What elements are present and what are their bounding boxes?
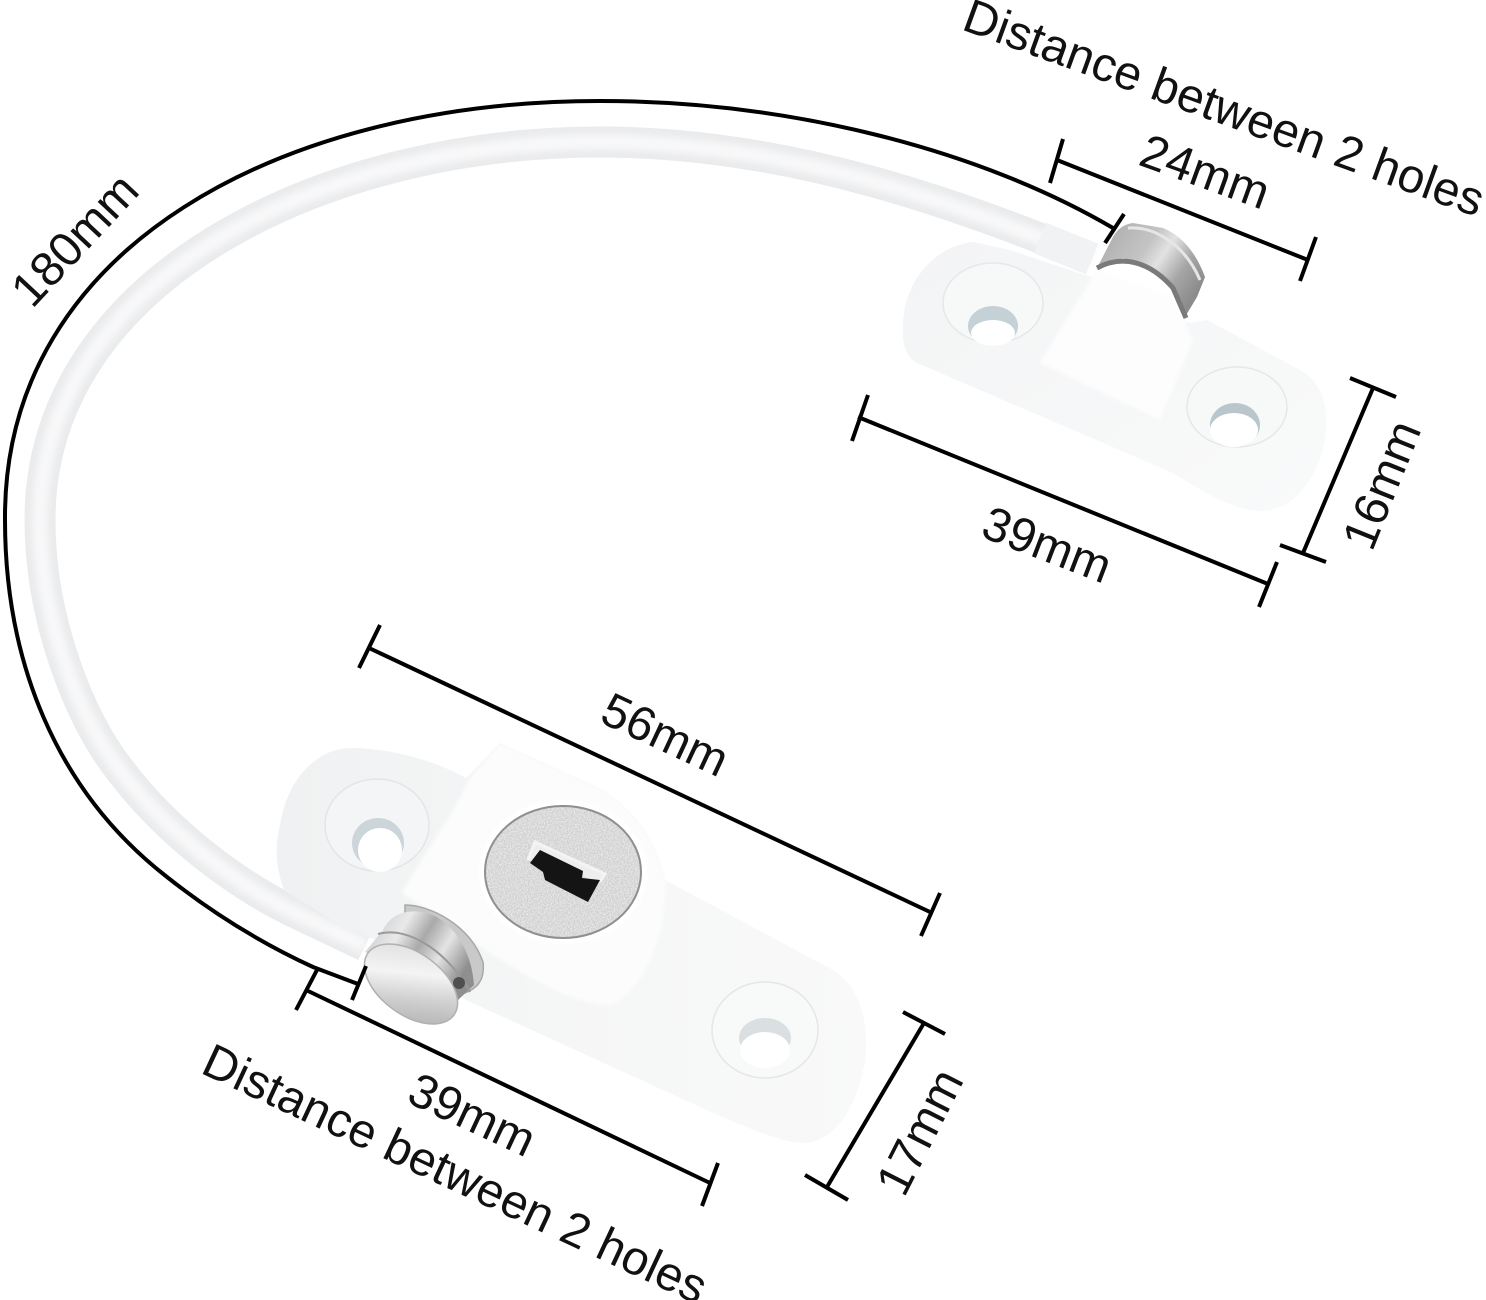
label: 39mm: 39mm bbox=[975, 497, 1119, 594]
keyhole rim bbox=[528, 842, 605, 882]
label: 16mm: 16mm bbox=[1333, 413, 1432, 557]
lock cylinder with keyhole bbox=[479, 800, 647, 944]
label: 56mm: 56mm bbox=[593, 683, 736, 788]
label: 24mm: 24mm bbox=[1133, 125, 1277, 220]
keyhole bbox=[530, 850, 600, 902]
dimension: 16mm base width, top bbox=[1280, 378, 1432, 562]
top bracket bbox=[903, 223, 1326, 511]
top bracket pedestal bbox=[1040, 270, 1193, 420]
label: 39mm: 39mm bbox=[400, 1063, 543, 1168]
bottom bracket left screw hole bbox=[325, 779, 429, 872]
bottom bracket right screw hole bbox=[712, 982, 818, 1078]
dimension: 39mm hole distance, bottom bbox=[296, 966, 718, 1206]
short tick at top cable end bbox=[1105, 214, 1124, 243]
dimension: 39mm base length, top bbox=[852, 395, 1277, 607]
top bracket left screw hole bbox=[943, 263, 1043, 346]
top bracket base plate bbox=[903, 242, 1326, 511]
top bracket right screw hole bbox=[1187, 367, 1287, 447]
bottom bracket base plate bbox=[277, 743, 866, 1143]
dimension: 17mm lock body width bbox=[805, 1012, 974, 1204]
dimension: 56mm lock body length bbox=[359, 625, 940, 936]
bottom bracket lock housing bbox=[402, 743, 665, 1005]
bottom bracket bbox=[277, 743, 866, 1143]
cable end resting over the base plate bbox=[1040, 238, 1092, 259]
cable: white sheathed wire bbox=[40, 142, 1092, 946]
label: 180mm cable length: 180mm bbox=[1, 164, 149, 317]
bottom bracket metal stud bbox=[350, 905, 483, 1040]
top bracket metal stud bbox=[1097, 223, 1205, 318]
dimension line: 180mm cable length arc bbox=[5, 101, 1113, 984]
label: 17mm: 17mm bbox=[867, 1061, 974, 1204]
dimension: 24mm hole distance, top bbox=[1050, 125, 1316, 281]
